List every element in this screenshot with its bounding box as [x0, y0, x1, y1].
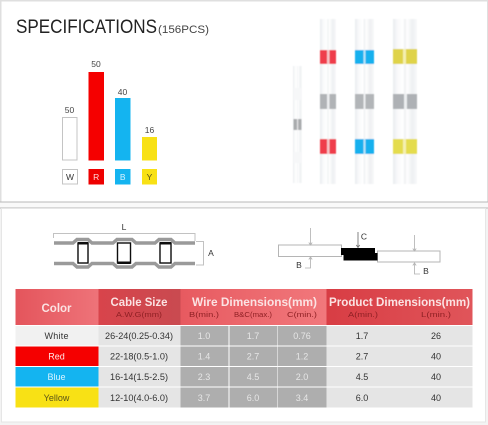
table header: Product Dimensions(mm)	[329, 297, 470, 309]
row: yellow: 12-10(4.0-6.0)	[110, 393, 168, 403]
row: red: 2.7	[247, 352, 259, 362]
bar chart: quantity by colour: 50	[65, 105, 74, 115]
diagram: crimped wire with B and C: C	[361, 232, 367, 242]
row: red: 22-18(0.5-1.0)	[110, 352, 168, 362]
row: blue: 4.5	[247, 372, 259, 382]
row: blue: 2.3	[198, 372, 210, 382]
legend: colour keys: B	[120, 172, 126, 182]
row: white: 1.7	[356, 331, 368, 341]
diagram: connector cross-section with L and A	[54, 222, 214, 267]
row: blue	[16, 367, 472, 386]
heading: specifications title: (156PCS)	[158, 24, 209, 36]
table header: A(min.)	[348, 310, 379, 319]
table header: Color	[42, 303, 72, 315]
table header: C(min.)	[287, 310, 318, 319]
row: yellow: 6.0	[247, 393, 259, 403]
row: white: 1.7	[247, 331, 259, 341]
row: white: 1.0	[198, 331, 210, 341]
row: white: 26-24(0.25-0.34)	[105, 331, 173, 341]
diagram: crimped wire with B and C: B	[296, 260, 302, 270]
row: yellow: Yellow	[44, 393, 70, 403]
row: white	[16, 326, 472, 346]
table header	[16, 289, 472, 325]
row: red: 1.4	[198, 352, 210, 362]
bar chart: quantity by colour	[62, 59, 157, 160]
illustration: white connector	[293, 66, 302, 183]
row: blue: 16-14(1.5-2.5)	[110, 372, 168, 382]
bar chart: quantity by colour: 40	[118, 87, 127, 97]
diagram: crimped wire with B and C: B	[423, 266, 429, 276]
legend: colour keys: W	[66, 172, 74, 182]
table header: Cable Size	[110, 297, 168, 309]
row: blue: 2.0	[296, 372, 308, 382]
row: blue: 40	[431, 372, 441, 382]
row: yellow: 40	[431, 393, 441, 403]
legend: colour keys	[62, 169, 157, 184]
diagram: connector cross-section with L and A: L	[122, 222, 127, 232]
legend: colour keys: R	[93, 172, 99, 182]
illustration: yellow connector	[393, 19, 417, 184]
row: red: 1.2	[296, 352, 308, 362]
illustration: blue connector	[355, 19, 374, 184]
table header: B(min.)	[189, 310, 220, 319]
heading: specifications title: SPECIFICATIONS	[16, 16, 157, 38]
legend: colour keys: Y	[147, 172, 153, 182]
row: white: 26	[431, 331, 441, 341]
row: yellow	[16, 388, 472, 408]
panel: specifications	[0, 0, 488, 202]
table: specifications	[16, 289, 472, 408]
row: yellow: 3.4	[296, 393, 308, 403]
bar chart: quantity by colour: 16	[145, 125, 154, 135]
table header: Wire Dimensions(mm)	[192, 297, 317, 309]
row: yellow: 3.7	[198, 393, 210, 403]
row: red: 2.7	[356, 352, 368, 362]
row: red: 40	[431, 352, 441, 362]
row: white: 0.76	[293, 331, 311, 341]
row: red: Red	[48, 352, 65, 362]
row: red	[16, 346, 472, 366]
diagram: crimped wire with B and C	[278, 228, 440, 276]
table header: A.W.G(mm)	[116, 310, 163, 319]
illustration: red connector	[320, 19, 336, 184]
table header: L(min.)	[421, 310, 452, 319]
diagram: connector cross-section with L and A: A	[208, 248, 214, 258]
row: blue: 4.5	[356, 372, 368, 382]
table header: B&C(max.)	[234, 310, 273, 319]
row: yellow: 6.0	[356, 393, 368, 403]
panel: dimensions	[0, 208, 488, 425]
row: blue: Blue	[47, 372, 66, 382]
row: white: White	[44, 331, 68, 341]
bar chart: quantity by colour: 50	[91, 59, 101, 69]
